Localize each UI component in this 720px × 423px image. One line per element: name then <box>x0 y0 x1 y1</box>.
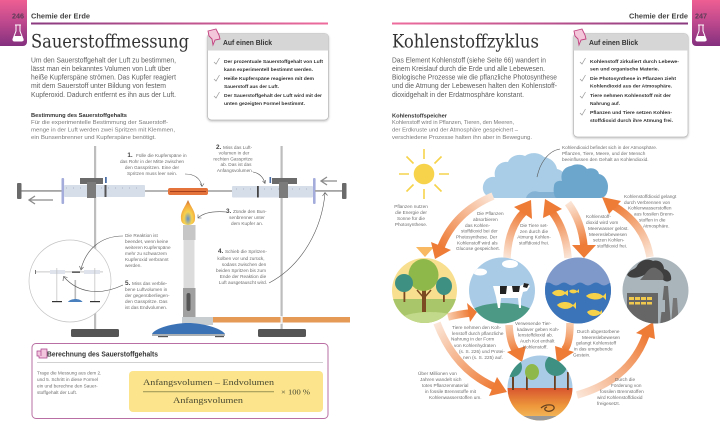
text: Meerwasser: dioxid wird vom <box>586 220 618 225</box>
running head left: Chemie der Erde <box>31 14 90 20</box>
panel: Berechnung des Sauerstoffgehalts <box>32 344 328 418</box>
text: Verbrennen: Kohlenwasserstoffen <box>628 206 672 210</box>
circle: factory <box>622 256 690 326</box>
step 4: 4. <box>218 248 224 255</box>
text: Millionen Jahre: Kohlenwasserstoffen um. <box>429 395 482 400</box>
text: Tiere setzen frei: stoffdioxid frei. <box>519 240 549 246</box>
step 5: 5. <box>125 280 131 287</box>
circle: trees <box>392 258 457 323</box>
intro text right: einem Kreislauf durch die Erde und alle Lebewesen. <box>392 64 545 73</box>
text: Förderung: Förderung von <box>611 383 642 388</box>
text: Tiere nehmen: nen (s. S. 225) auf. <box>463 355 503 360</box>
panel: Auf einen Blick left <box>208 29 328 120</box>
circle: soil with fossil <box>508 356 572 420</box>
step 5 <box>125 280 170 310</box>
page tab right <box>692 0 720 46</box>
text: Kohlendioxid in der Atmosphäre <box>562 145 657 162</box>
panel: Auf einen Blick left: Sauerstoff aus der Luft. <box>224 84 280 90</box>
intro text right: dioxidgehalt in der Erdatmosphäre konstant. <box>392 90 524 99</box>
panel: Auf einen Blick right <box>574 29 688 137</box>
text: Förderung <box>597 377 644 406</box>
step 2: ab. Das ist das <box>220 162 252 167</box>
subsection: Bestimmung des Sauerstoffgehalts: Für die experimentelle Bestimmung der Sauerstoff- <box>31 120 168 126</box>
subsection: Bestimmung des Sauerstoffgehalts: menge in der Luft werden zwei Spritzen mit Klemmen, <box>31 128 175 134</box>
title: Kohlenstoffzyklus: Kohlenstoffzyklus <box>392 32 539 52</box>
page tab left: 246 <box>12 12 24 20</box>
note: Reaktion beendet: Die Reaktion ist <box>125 233 159 238</box>
text: Meerwasser: Meerwasser gelöst. <box>588 226 629 231</box>
text: abgestorbene Meereslebewesen: in das umgebende <box>574 346 613 352</box>
subsection: Kohlenstoffspeicher <box>392 114 532 141</box>
panel: Berechnung des Sauerstoffgehalts: Berechnung des Sauerstoffgehalts <box>47 352 158 358</box>
step 4: Ende der Reaktion die <box>220 274 267 279</box>
panel: Auf einen Blick right: stoffdioxid durch ihre Atmung frei. <box>590 118 674 124</box>
step 4: Luft ausgetauscht wird. <box>219 280 267 285</box>
icon: calculation <box>37 349 47 358</box>
text: Pflanzen absorbieren <box>456 211 504 251</box>
subsection: Kohlenstoffspeicher: Kohlenstoff wird in Pflanzen, Tieren, den Meeren, <box>392 120 514 126</box>
text: Meerwasser: setzen Kohlen- <box>593 238 625 242</box>
text: Pflanzen nutzen: Sonne für die <box>397 216 425 221</box>
panel: Berechnung des Sauerstoffgehalts: ein und berechne den Sauer- <box>37 384 98 388</box>
apparatus: stands <box>71 146 306 337</box>
text: Tiere setzen frei <box>517 223 551 246</box>
cloud leader line <box>537 149 560 177</box>
text: Verbrennen: Atmosphäre. <box>643 224 670 228</box>
intro text right <box>392 56 557 99</box>
text: Verwesende Tierkadaver: kadaver geben Koh- <box>517 327 560 332</box>
page tab right: 247 <box>695 12 707 20</box>
subsection: Kohlenstoffspeicher: der Erdkruste und der Atmosphäre gespeichert – <box>392 128 519 134</box>
text: Verbrennen: aus fossilen Brenn- <box>634 212 675 216</box>
text: Pflanzen nutzen: die Energie der <box>395 210 427 215</box>
apparatus: left syringe <box>17 177 169 204</box>
step 1: den Gasspritzen. Eine der <box>125 165 180 170</box>
step 1 <box>120 152 187 176</box>
note: Reaktion beendet: Kupferoxid verbrannt <box>125 257 169 262</box>
text: Verwesende Tierkadaver: Kohlenstoff. <box>523 344 548 350</box>
intro text right: Das Element Kohlenstoff (siehe Seite 66) wandert in <box>392 56 546 64</box>
apparatus: right syringe <box>232 177 346 204</box>
arrow: tree to soil <box>437 323 507 396</box>
intro text left: Um den Sauerstoffgehalt der Luft zu bestimmen, <box>31 56 176 64</box>
arrow: cloud to tree <box>431 196 493 259</box>
step 1: das Rohr in der Mitte zwischen <box>120 159 184 164</box>
intro text right: und die Atmung der Lebewesen halten den Kohlenstoff- <box>392 81 557 90</box>
step 3: Zünde den Bun- <box>233 209 267 214</box>
step 4: beiden Spritzen bis zum <box>216 268 266 273</box>
intro text left: Kupferoxid. Dadurch entfernt es ihn aus der Luft. <box>31 90 176 99</box>
text: Millionen Jahre <box>418 370 482 400</box>
text: Verbrennen: Kohlenstoffdioxid gelangt <box>624 194 677 199</box>
text: Millionen Jahre: totes Pflanzenmaterial <box>422 383 468 388</box>
step 5: Miss das verblie- <box>132 281 168 286</box>
panel: Auf einen Blick right: Nahrung auf. <box>590 101 621 107</box>
arrow: cow to soil <box>507 325 526 362</box>
panel: Auf einen Blick left: unten gezeigten Formel bestimmt. <box>224 101 306 107</box>
text: Meerwasser: stoffdioxid frei. <box>597 244 627 248</box>
intro text left: lässt man ein bekanntes Volumen von Luft über <box>31 64 171 73</box>
title: Sauerstoffmessung: Sauerstoffmessung <box>31 32 189 52</box>
text: Pflanzen absorbieren: Photosynthese. Der <box>456 234 498 240</box>
step 4: kolben vor und zurück, <box>217 256 265 261</box>
note: Reaktion beendet: beendet, wenn keine <box>125 239 169 244</box>
step 4: sodass zwischen den <box>222 262 267 267</box>
circle: sea <box>545 258 611 324</box>
text: Millionen Jahre: Jahren wandelt sich <box>420 377 462 382</box>
step 3: dem Kupfer an. <box>231 221 263 226</box>
step 5: ist das Endvolumen. <box>125 305 167 310</box>
text: Förderung: wird Kohlenstoffdioxid <box>597 395 643 400</box>
panel: Auf einen Blick right: Tiere nehmen Kohlenstoff mit der <box>590 93 671 99</box>
arrow: cow to cloud <box>507 200 532 258</box>
page tab left <box>0 0 27 46</box>
text: Tiere nehmen: von Kohlenhydraten <box>454 343 496 348</box>
inset circle: end of reaction <box>29 240 111 322</box>
subsection: Kohlenstoffspeicher: verschiedene Prozesse halten ihn aber in Bewegung. <box>392 135 532 141</box>
note: Reaktion beendet: mehr zu schwarzem <box>125 251 167 256</box>
panel: Berechnung des Sauerstoffgehalts: und 5. Schritt in diese Formel <box>37 377 98 382</box>
subsection: Bestimmung des Sauerstoffgehalts: ein Bunsenbrenner und Kupferspäne benötigt. <box>31 135 156 141</box>
subsection: Kohlenstoffspeicher: Kohlenstoffspeicher <box>392 114 448 120</box>
arrow: tree to cow <box>448 303 477 322</box>
panel: Auf einen Blick left: Heiße Kupferspäne reagieren mit dem <box>224 76 315 82</box>
panel: Auf einen Blick right: Kohlendioxid aus der Atmosphäre. <box>590 83 673 89</box>
text: Meerwasser: Meereslebewesen <box>589 232 627 237</box>
text: Verwesende Tierkadaver <box>515 321 560 350</box>
text: Pflanzen nutzen <box>394 204 428 227</box>
text: abgestorbene Meereslebewesen <box>573 329 620 358</box>
step 2: rechten Gasspritze <box>213 156 253 162</box>
intro text left <box>31 56 176 99</box>
note: Reaktion beendet: werden. <box>125 263 142 268</box>
text: Förderung: freigesetzt. <box>597 401 620 406</box>
text: Meerwasser: Kohlenstoff- <box>586 214 611 219</box>
arrow: sun to tree <box>416 232 434 257</box>
text: Verbrennen <box>624 194 677 228</box>
text: Meerwasser <box>586 214 629 248</box>
panel: Auf einen Blick left: Auf einen Blick <box>223 40 272 47</box>
text: Verwesende Tierkadaver: Verwesende Tier- <box>515 321 552 326</box>
formula: Anfangsvolumen <box>173 395 244 405</box>
panel: Auf einen Blick right: Auf einen Blick <box>589 40 638 47</box>
text: abgestorbene Meereslebewesen: gelangt Kohlenstoff <box>576 340 617 346</box>
panel: Auf einen Blick left: kann experimentell bestimmt werden. <box>224 67 314 73</box>
text: Tiere nehmen <box>451 325 505 360</box>
text: Kohlendioxid in der Atmosphäre: Kohlendioxid befindet sich in der Atmosphäre. <box>562 145 657 150</box>
text: Verwesende Tierkadaver: lenstoffdioxid ab. <box>518 332 553 338</box>
text: Förderung: fossilen Brennstoffen <box>600 389 644 394</box>
circle: cow <box>469 258 535 324</box>
note: Reaktion beendet <box>125 233 171 268</box>
cloud <box>483 153 608 198</box>
panel: Auf einen Blick right: Pflanzen und Tiere setzen Kohlen- <box>590 110 672 116</box>
icon: sun <box>399 149 449 199</box>
step 4: Schieb die Spritzen- <box>225 249 267 254</box>
step 1: Spritzen muss leer sein. <box>127 171 177 176</box>
text: Tiere nehmen: (s. S. 226) und Protei- <box>459 349 505 354</box>
arrow: soil to factory <box>577 322 655 395</box>
arrow: sea to soil <box>555 323 574 363</box>
text: Pflanzen absorbieren: Glucose gespeichert. <box>456 246 500 251</box>
panel: Berechnung des Sauerstoffgehalts: Trage die Messung aus dem 2. <box>37 370 101 376</box>
text: Pflanzen absorbieren: stoffdioxid bei der <box>461 228 498 234</box>
intro text right: Biologische Prozesse wie die pflanzliche Photosynthese <box>392 72 557 82</box>
apparatus: Bunsen burner <box>152 200 350 337</box>
icon: pin left <box>208 29 220 45</box>
step 2: Anfangsvolumen. <box>217 168 253 173</box>
arrow: sea to cloud <box>543 199 568 258</box>
intro text left: mit dem Sauerstoff unter Bildung von festem <box>31 81 166 90</box>
step 5: der gegenüberliegen- <box>125 293 170 298</box>
text: Verbrennen: stoffen in die <box>639 218 666 222</box>
step 3: senbrenner unter <box>229 215 265 220</box>
step 5: den Gasspritze. Das <box>125 299 168 304</box>
text: Pflanzen absorbieren: Kohlenstoff wird als <box>457 240 498 246</box>
formula: Anfangsvolumen – Endvolumen <box>143 377 275 387</box>
step 5: bene Luftvolumen in <box>125 287 168 292</box>
text: Kohlendioxid in der Atmosphäre: Pflanzen, Tiere, Meere, und der Mensch <box>562 151 646 156</box>
text: abgestorbene Meereslebewesen: Durch abgestorbene <box>577 329 620 334</box>
text: abgestorbene Meereslebewesen: Gestein. <box>573 352 590 358</box>
text: abgestorbene Meereslebewesen: Meereslebewesen <box>582 335 620 340</box>
panel: Auf einen Blick right: sen und organische Materie. <box>590 66 660 72</box>
text: Pflanzen nutzen: Pflanzen nutzen <box>394 204 428 209</box>
running head right: Chemie der Erde <box>629 14 688 20</box>
text: Pflanzen absorbieren: das Kohlen- <box>465 223 490 228</box>
text: Tiere nehmen: Tiere nehmen den Koh- <box>452 325 502 330</box>
text: Pflanzen nutzen: Photosynthese. <box>395 222 427 227</box>
panel: Berechnung des Sauerstoffgehalts: stoffgehalt der Luft. <box>37 390 77 395</box>
text: Millionen Jahre: in fossile Brennstoffe mit <box>425 389 477 394</box>
panel: Auf einen Blick left: Der prozentuale Sauerstoffgehalt von Luft <box>224 59 323 65</box>
panel: Auf einen Blick right: Kohlenstoff zirkuliert durch Lebewe- <box>590 59 679 65</box>
step 3: 3. <box>226 208 232 215</box>
panel: Auf einen Blick right: Die Photosynthese in Pflanzen zieht <box>590 76 676 82</box>
step 3 <box>226 208 267 226</box>
step 1: 1. <box>127 152 133 159</box>
subsection: Bestimmung des Sauerstoffgehalts <box>31 113 175 141</box>
step 1: Fülle die Kupferspäne in <box>136 153 187 158</box>
panel: Auf einen Blick left: Der Sauerstoffgehalt der Luft wird mit der <box>224 93 322 99</box>
step 2 <box>213 144 253 173</box>
icon: pin right <box>574 29 586 45</box>
step 2: Miss das Luft- <box>223 145 253 150</box>
apparatus: copper tube <box>168 188 232 195</box>
step 4 <box>216 248 267 285</box>
step 2: 2. <box>216 144 222 151</box>
text: Tiere nehmen: lenstoff durch pflanzliche <box>452 331 504 336</box>
text: Förderung: Durch die <box>615 377 635 382</box>
text: Tiere setzen frei: zen durch die <box>520 229 548 234</box>
arrow: factory to cloud <box>602 197 650 257</box>
intro text left: heiße Kupferspäne strömen. Das Kupfer reagiert <box>31 72 176 82</box>
step 2: volumen in der <box>219 150 250 156</box>
text: Tiere nehmen: Nahrung in der Form <box>451 336 494 342</box>
text: Verwesende Tierkadaver: Auch Kot enthält <box>520 338 555 344</box>
text: Kohlendioxid in der Atmosphäre: beeinflussen den Gehalt an Kohlendioxid. <box>562 157 649 162</box>
text: Verbrennen: durch Verbrennen von <box>624 200 671 205</box>
text: Pflanzen absorbieren: absorbieren <box>473 217 498 222</box>
text: Millionen Jahre: Über Millionen von <box>418 370 457 376</box>
text: Tiere setzen frei: Die Tiere set- <box>520 223 548 228</box>
formula: × 100 % <box>281 388 311 396</box>
formula <box>143 377 311 405</box>
text: Tiere setzen frei: Atmung Kohlen- <box>517 234 551 240</box>
note: Reaktion beendet: weiteren Kupferspäne <box>125 245 171 250</box>
arrow: cloud to sea <box>568 203 596 258</box>
callout arrows apparatus <box>63 172 328 292</box>
text: Pflanzen absorbieren: Die Pflanzen <box>477 211 504 216</box>
subsection: Bestimmung des Sauerstoffgehalts: Bestimmung des Sauerstoffgehalts <box>31 113 128 119</box>
